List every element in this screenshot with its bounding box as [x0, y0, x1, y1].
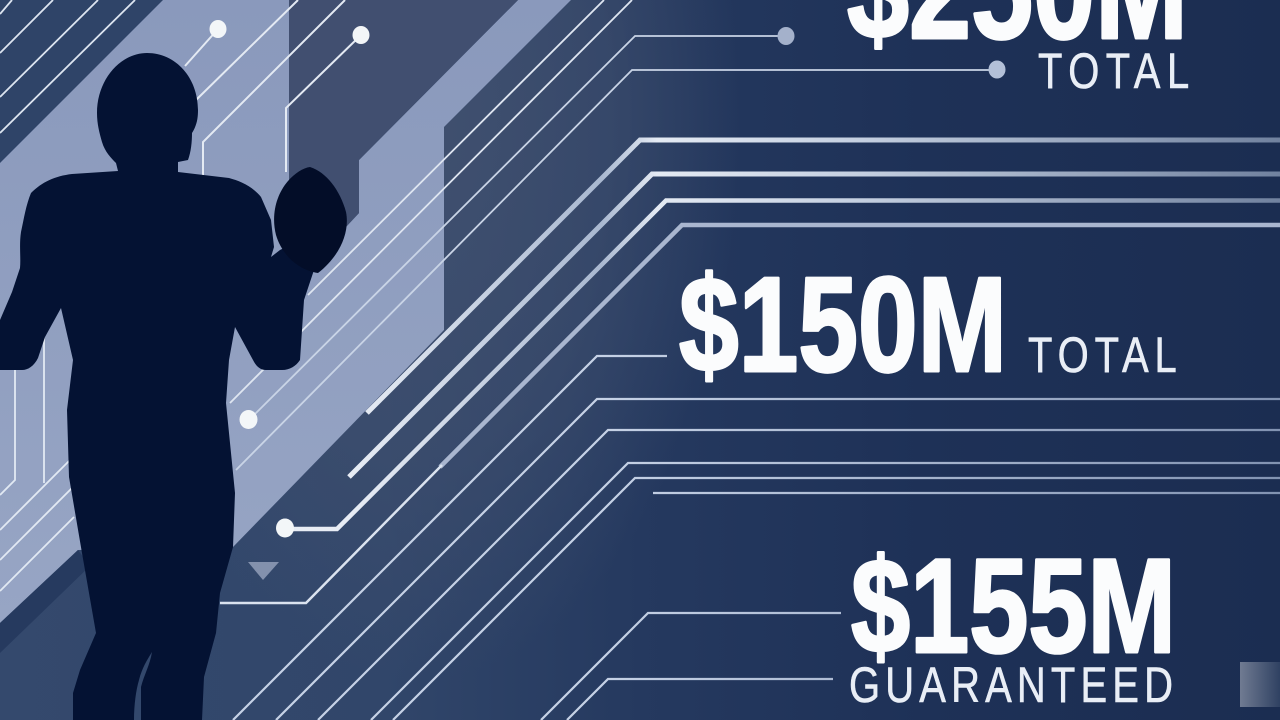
stat: $250M total: TOTAL — [1038, 43, 1189, 99]
circuit lines: thick upper traces — [220, 140, 1280, 603]
icon: circuit nodes — [210, 20, 1006, 538]
circuit lines: upper-left diagonals — [0, 0, 135, 133]
stat: $250M total — [847, 0, 1189, 99]
square marker — [1240, 662, 1280, 707]
stat: $155M guaranteed — [849, 532, 1176, 713]
circuit lines: upper node traces — [185, 0, 361, 178]
stat: $150M total: TOTAL — [1028, 327, 1177, 383]
icon: down triangle — [248, 562, 279, 580]
panel: upper-left dark corner — [0, 0, 163, 163]
silhouette: quarterback — [0, 53, 347, 720]
panel: light geometric backdrop — [0, 0, 571, 623]
stat: $150M total: $150M — [679, 249, 1007, 400]
stat: $155M guaranteed: GUARANTEED — [849, 657, 1173, 713]
panel: dark centre column — [289, 0, 518, 228]
panel: right dark fade — [200, 0, 900, 720]
circuit lines: lower traces — [233, 356, 1280, 720]
circuit lines: lower-left — [0, 335, 74, 591]
circuit lines: mid diagonals to top-right — [230, 0, 997, 470]
icon: football — [274, 167, 347, 273]
stat: $155M guaranteed: $155M — [851, 532, 1176, 681]
panel: lower-left dark strip — [0, 550, 90, 653]
